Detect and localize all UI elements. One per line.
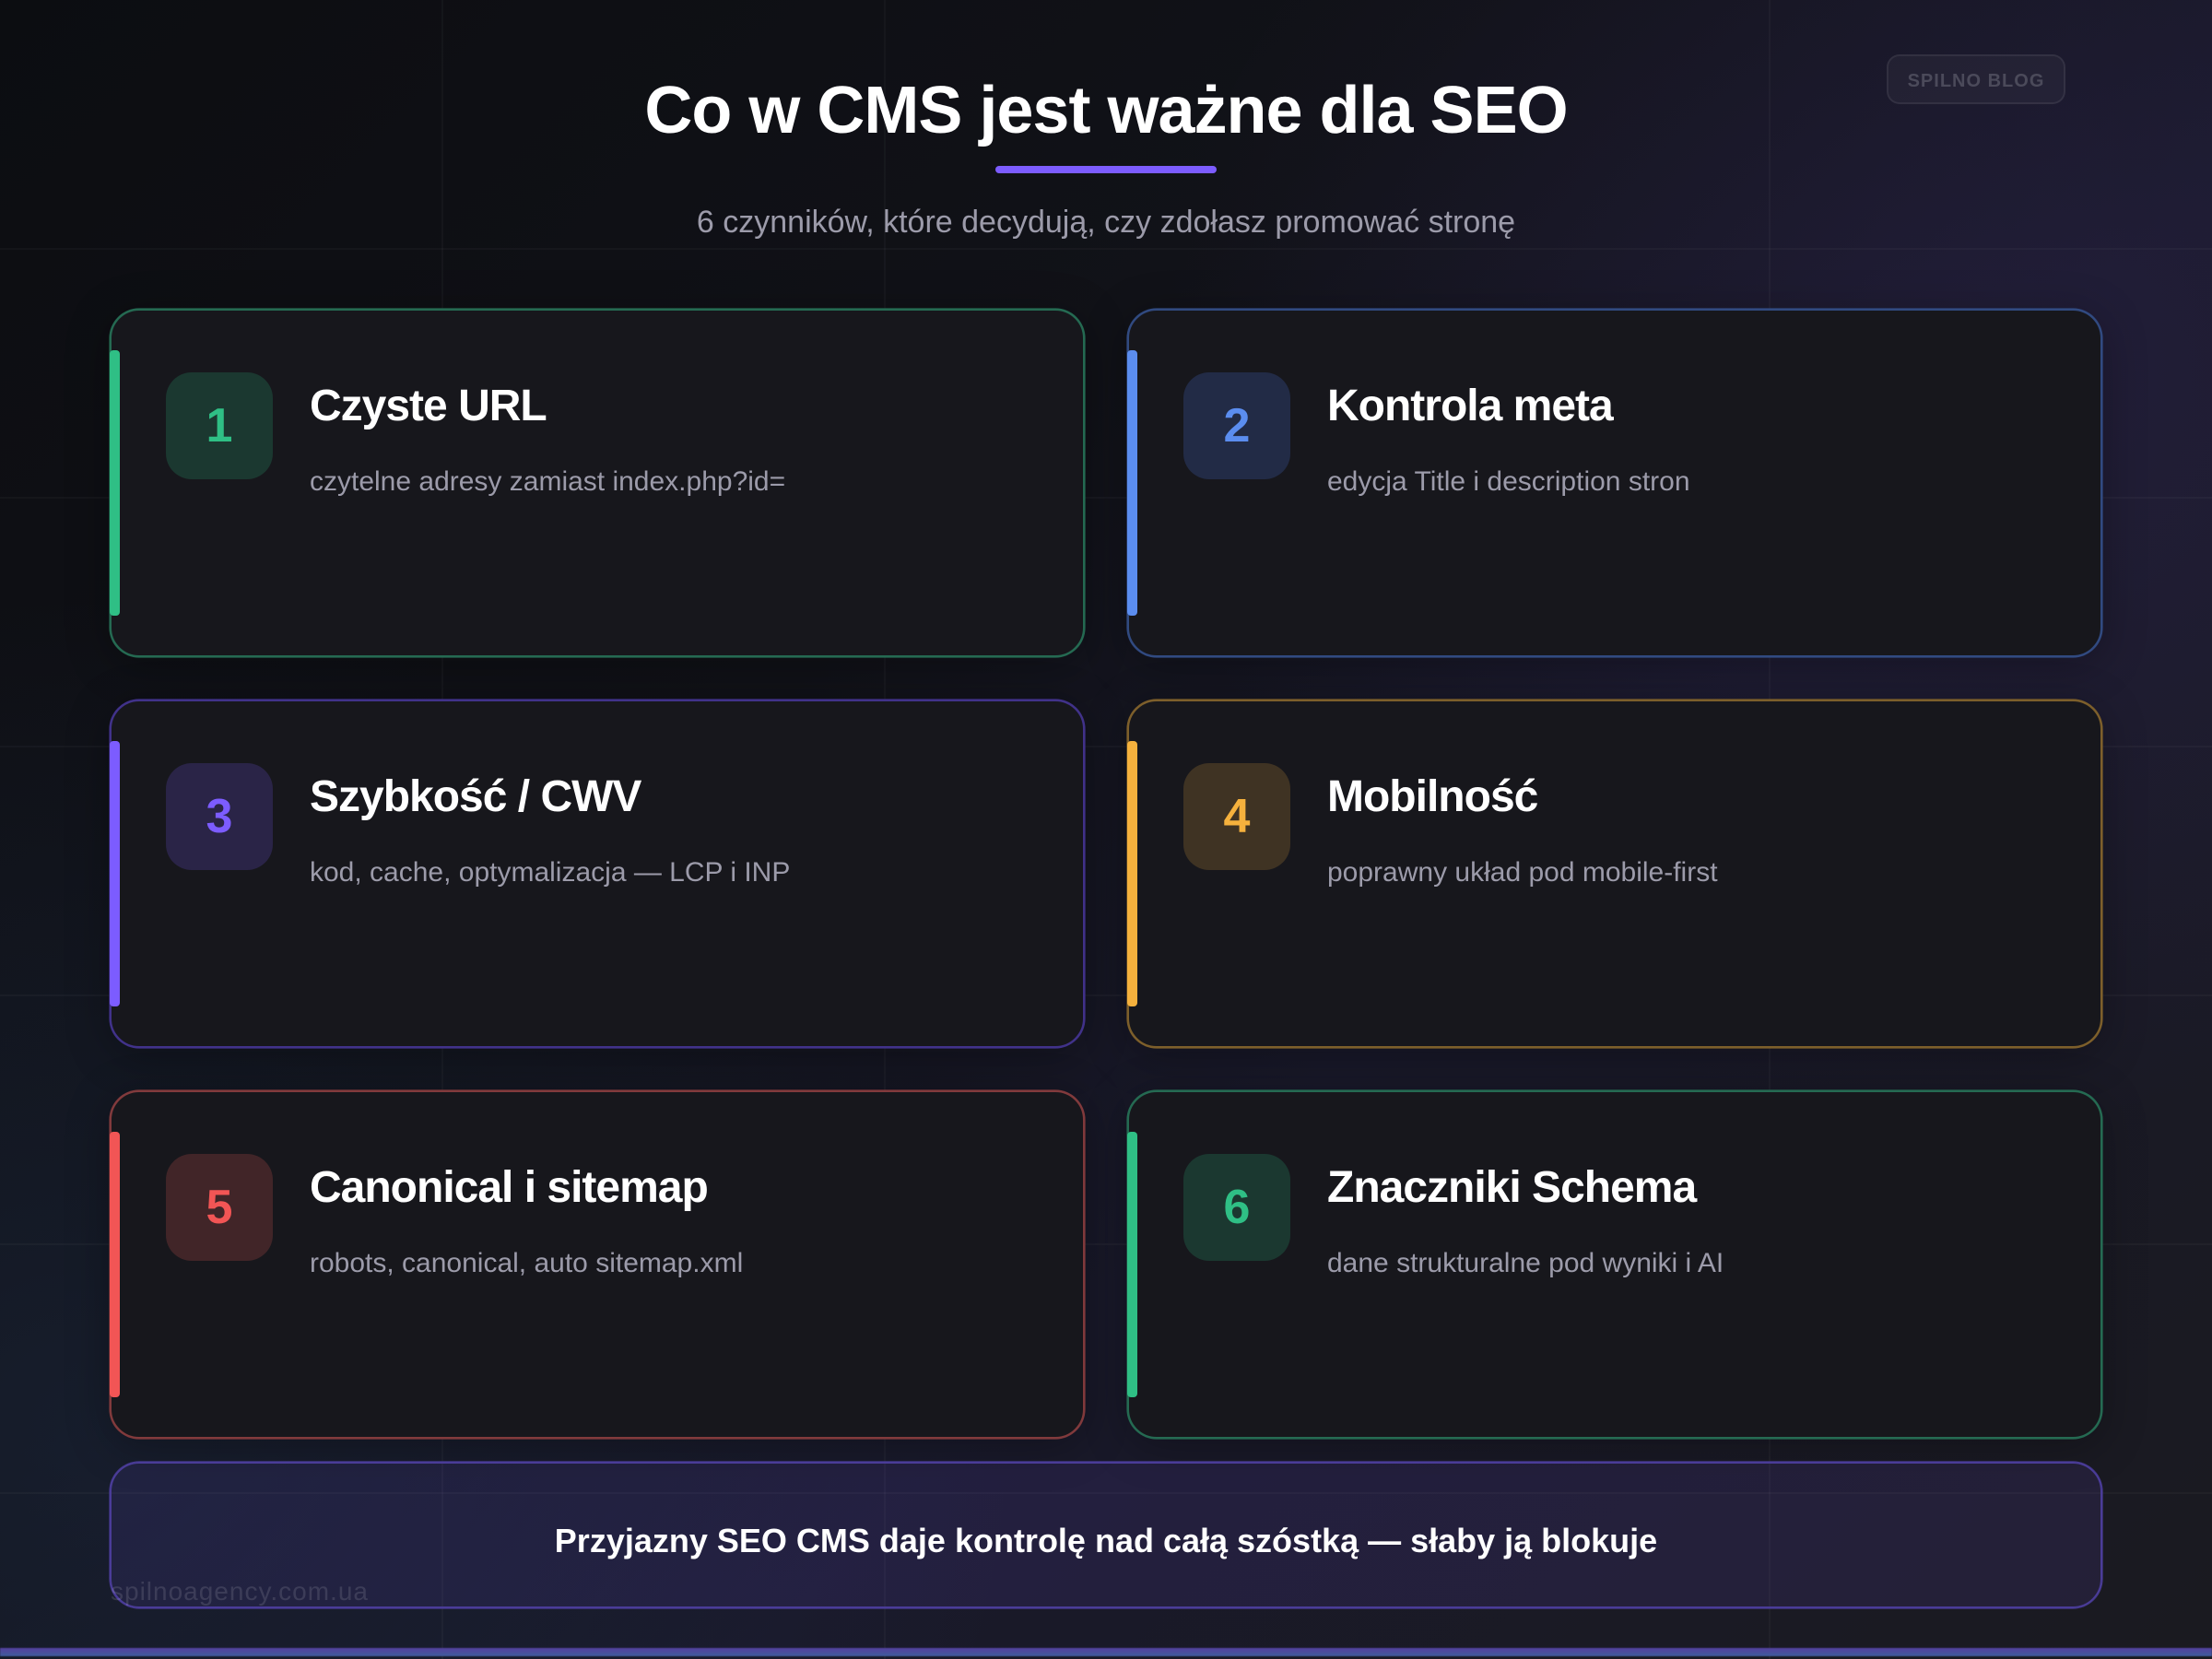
- heading 4: Mobilność: [1327, 772, 1537, 821]
- icon: number 5: 5: [206, 1181, 232, 1234]
- bottom accent line: [0, 1648, 2212, 1656]
- description 4: poprawny układ pod mobile-first: [1327, 857, 1718, 888]
- watermark: spilnoagency.com.ua: [111, 1577, 369, 1606]
- description 1: czytelne adresy zamiast index.php?id=: [310, 466, 785, 497]
- heading 5: Canonical i sitemap: [310, 1163, 708, 1212]
- icon: number 6: 6: [1224, 1181, 1250, 1234]
- badge: Spilno Blog: SPILNO BLOG: [1908, 71, 2044, 91]
- panel: card 2: [1127, 309, 2102, 657]
- subtitle: 6 czynników, które decydują, czy zdołasz promować stronę: [697, 205, 1515, 240]
- icon: number 2: [1183, 372, 1290, 479]
- description 5: robots, canonical, auto sitemap.xml: [310, 1248, 743, 1278]
- panel: card 1: [110, 309, 1085, 657]
- icon: number 4: [1183, 763, 1290, 870]
- heading 2: Kontrola meta: [1327, 382, 1613, 430]
- badge: Spilno Blog: [1887, 54, 2065, 104]
- description 6: dane strukturalne pod wyniki i AI: [1327, 1248, 1724, 1278]
- icon: number 6: [1183, 1154, 1290, 1261]
- accent bar 5: [110, 1132, 120, 1397]
- title: Co w CMS jest ważne dla SEO: [644, 74, 1568, 147]
- heading 1: Czyste URL: [310, 382, 547, 430]
- accent bar 4: [1127, 741, 1137, 1006]
- icon: number 4: 4: [1224, 790, 1250, 843]
- description 2: edycja Title i description stron: [1327, 466, 1690, 497]
- heading 6: Znaczniki Schema: [1327, 1163, 1696, 1212]
- title underline: [995, 166, 1217, 173]
- icon: number 3: 3: [206, 790, 232, 843]
- summary callout: [110, 1462, 2102, 1608]
- accent bar 2: [1127, 350, 1137, 616]
- panel: card 3: [110, 700, 1085, 1048]
- description 3: kod, cache, optymalizacja — LCP i INP: [310, 857, 790, 888]
- accent bar 6: [1127, 1132, 1137, 1397]
- heading 3: Szybkość / CWV: [310, 772, 641, 821]
- icon: number 3: [166, 763, 273, 870]
- panel: card 5: [110, 1090, 1085, 1439]
- accent bar 1: [110, 350, 120, 616]
- panel: card 6: [1127, 1090, 2102, 1439]
- icon: number 5: [166, 1154, 273, 1261]
- icon: number 2: 2: [1224, 399, 1250, 453]
- accent bar 3: [110, 741, 120, 1006]
- panel: card 4: [1127, 700, 2102, 1048]
- summary callout: Przyjazny SEO CMS daje kontrolę nad całą szóstką — słaby ją blokuje: [555, 1522, 1657, 1559]
- icon: number 1: 1: [206, 399, 232, 453]
- icon: number 1: [166, 372, 273, 479]
